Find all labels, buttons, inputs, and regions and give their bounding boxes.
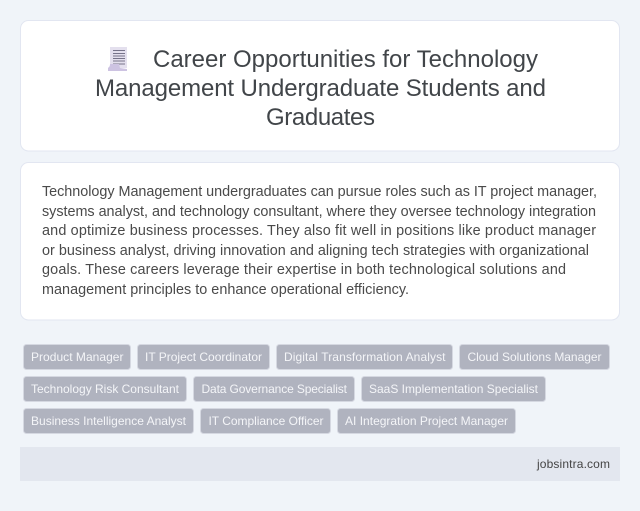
text block: description paragraph: systems analyst, and technology consultant, where they oversee technology integration [42, 204, 596, 220]
tag: AI Integration Project Manager: AI Integration Project Manager [345, 414, 508, 428]
text block: description paragraph: Technology Management undergraduates can pursue roles such as IT project manager, [42, 184, 597, 200]
title: Graduates [266, 104, 375, 131]
title: Management Undergraduate Students and [95, 75, 546, 102]
tag: SaaS Implementation Specialist [362, 376, 546, 402]
panel: title card [20, 20, 620, 151]
text block: description paragraph: management principles to enhance operational efficiency. [42, 282, 409, 298]
panel: description [20, 162, 620, 320]
text block: description paragraph: or business analyst, driving innovation and aligning tech strategies with organizational [42, 243, 589, 259]
tag: IT Project Coordinator [138, 344, 270, 370]
tag: IT Compliance Officer [200, 408, 330, 434]
tag: IT Project Coordinator: IT Project Coordinator [145, 350, 262, 364]
tag: Digital Transformation Analyst: Digital Transformation Analyst [284, 350, 446, 364]
tag: Technology Risk Consultant [24, 376, 186, 402]
text block: description paragraph: goals. These careers leverage their expertise in both technological solutions and [42, 262, 566, 278]
tag: Data Governance Specialist: Data Governance Specialist [202, 382, 348, 396]
title: Career Opportunities for Technology [153, 46, 538, 73]
icon: paper receipt [108, 47, 127, 71]
text block: description paragraph: and optimize business processes. They also fit well in positions like product manager [42, 223, 596, 239]
tag: Cloud Solutions Manager [460, 344, 610, 370]
tag: SaaS Implementation Specialist: SaaS Implementation Specialist [369, 382, 539, 396]
title [95, 46, 546, 131]
text block: description paragraph [42, 184, 597, 298]
tag: AI Integration Project Manager [338, 408, 516, 434]
footer bar [20, 447, 620, 481]
tag: Product Manager: Product Manager [31, 350, 124, 364]
tag list: career roles [24, 344, 610, 434]
tag: Digital Transformation Analyst [276, 344, 452, 370]
footer source text: jobsintra.com [536, 457, 610, 471]
tag: Business Intelligence Analyst [24, 408, 194, 434]
tag: Data Governance Specialist [194, 376, 354, 402]
tag: Technology Risk Consultant: Technology Risk Consultant [31, 382, 180, 396]
tag: IT Compliance Officer: IT Compliance Officer [208, 414, 324, 428]
tag: Product Manager [24, 344, 130, 370]
tag: Business Intelligence Analyst: Business Intelligence Analyst [31, 414, 187, 428]
tag: Cloud Solutions Manager: Cloud Solutions Manager [468, 350, 602, 364]
